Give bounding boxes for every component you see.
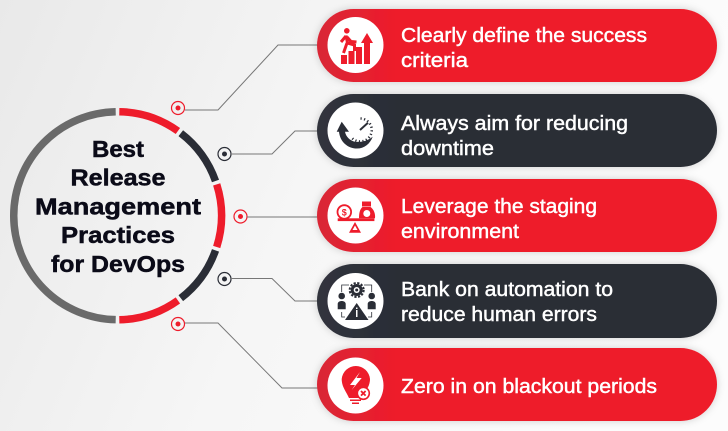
panel: blackout periods: Zero in on blackout periods bbox=[401, 376, 657, 398]
panel: downtime: Always aim for reducing bbox=[401, 113, 628, 135]
panel: staging: environment bbox=[401, 221, 519, 243]
icon: reverse clock arrow bbox=[337, 118, 373, 148]
title: Management bbox=[35, 193, 201, 219]
panel: blackout periods bbox=[317, 348, 717, 421]
connector 2 bbox=[218, 131, 318, 160]
connector 4 bbox=[218, 272, 318, 301]
panel: automation bbox=[317, 264, 717, 338]
connector 3 bbox=[234, 210, 318, 223]
icon: balance scale: $ bbox=[342, 208, 347, 218]
connector 1 bbox=[172, 45, 318, 114]
icon: climbing bars bbox=[341, 28, 373, 64]
title: for DevOps bbox=[51, 251, 185, 277]
panel: success criteria: Clearly define the success bbox=[401, 25, 647, 47]
icon: balance scale bbox=[338, 202, 375, 233]
panel: automation: reduce human errors bbox=[401, 304, 597, 326]
panel: staging bbox=[317, 179, 717, 252]
panel: success criteria bbox=[317, 9, 717, 82]
icon: gear people warning bbox=[338, 283, 376, 320]
panel: success criteria: criteria bbox=[401, 50, 469, 72]
title: Best bbox=[92, 136, 144, 162]
ring: segmented circle bbox=[14, 112, 222, 320]
panel: staging: Leverage the staging bbox=[401, 196, 597, 218]
connector 5 bbox=[172, 318, 318, 388]
icon: light bulb bbox=[342, 366, 370, 404]
panel: downtime bbox=[317, 94, 717, 167]
title: Release bbox=[70, 165, 166, 191]
title bbox=[35, 136, 201, 277]
panel: automation: Bank on automation to bbox=[401, 279, 613, 301]
panel: downtime: downtime bbox=[401, 138, 494, 160]
title: Practices bbox=[61, 222, 175, 248]
